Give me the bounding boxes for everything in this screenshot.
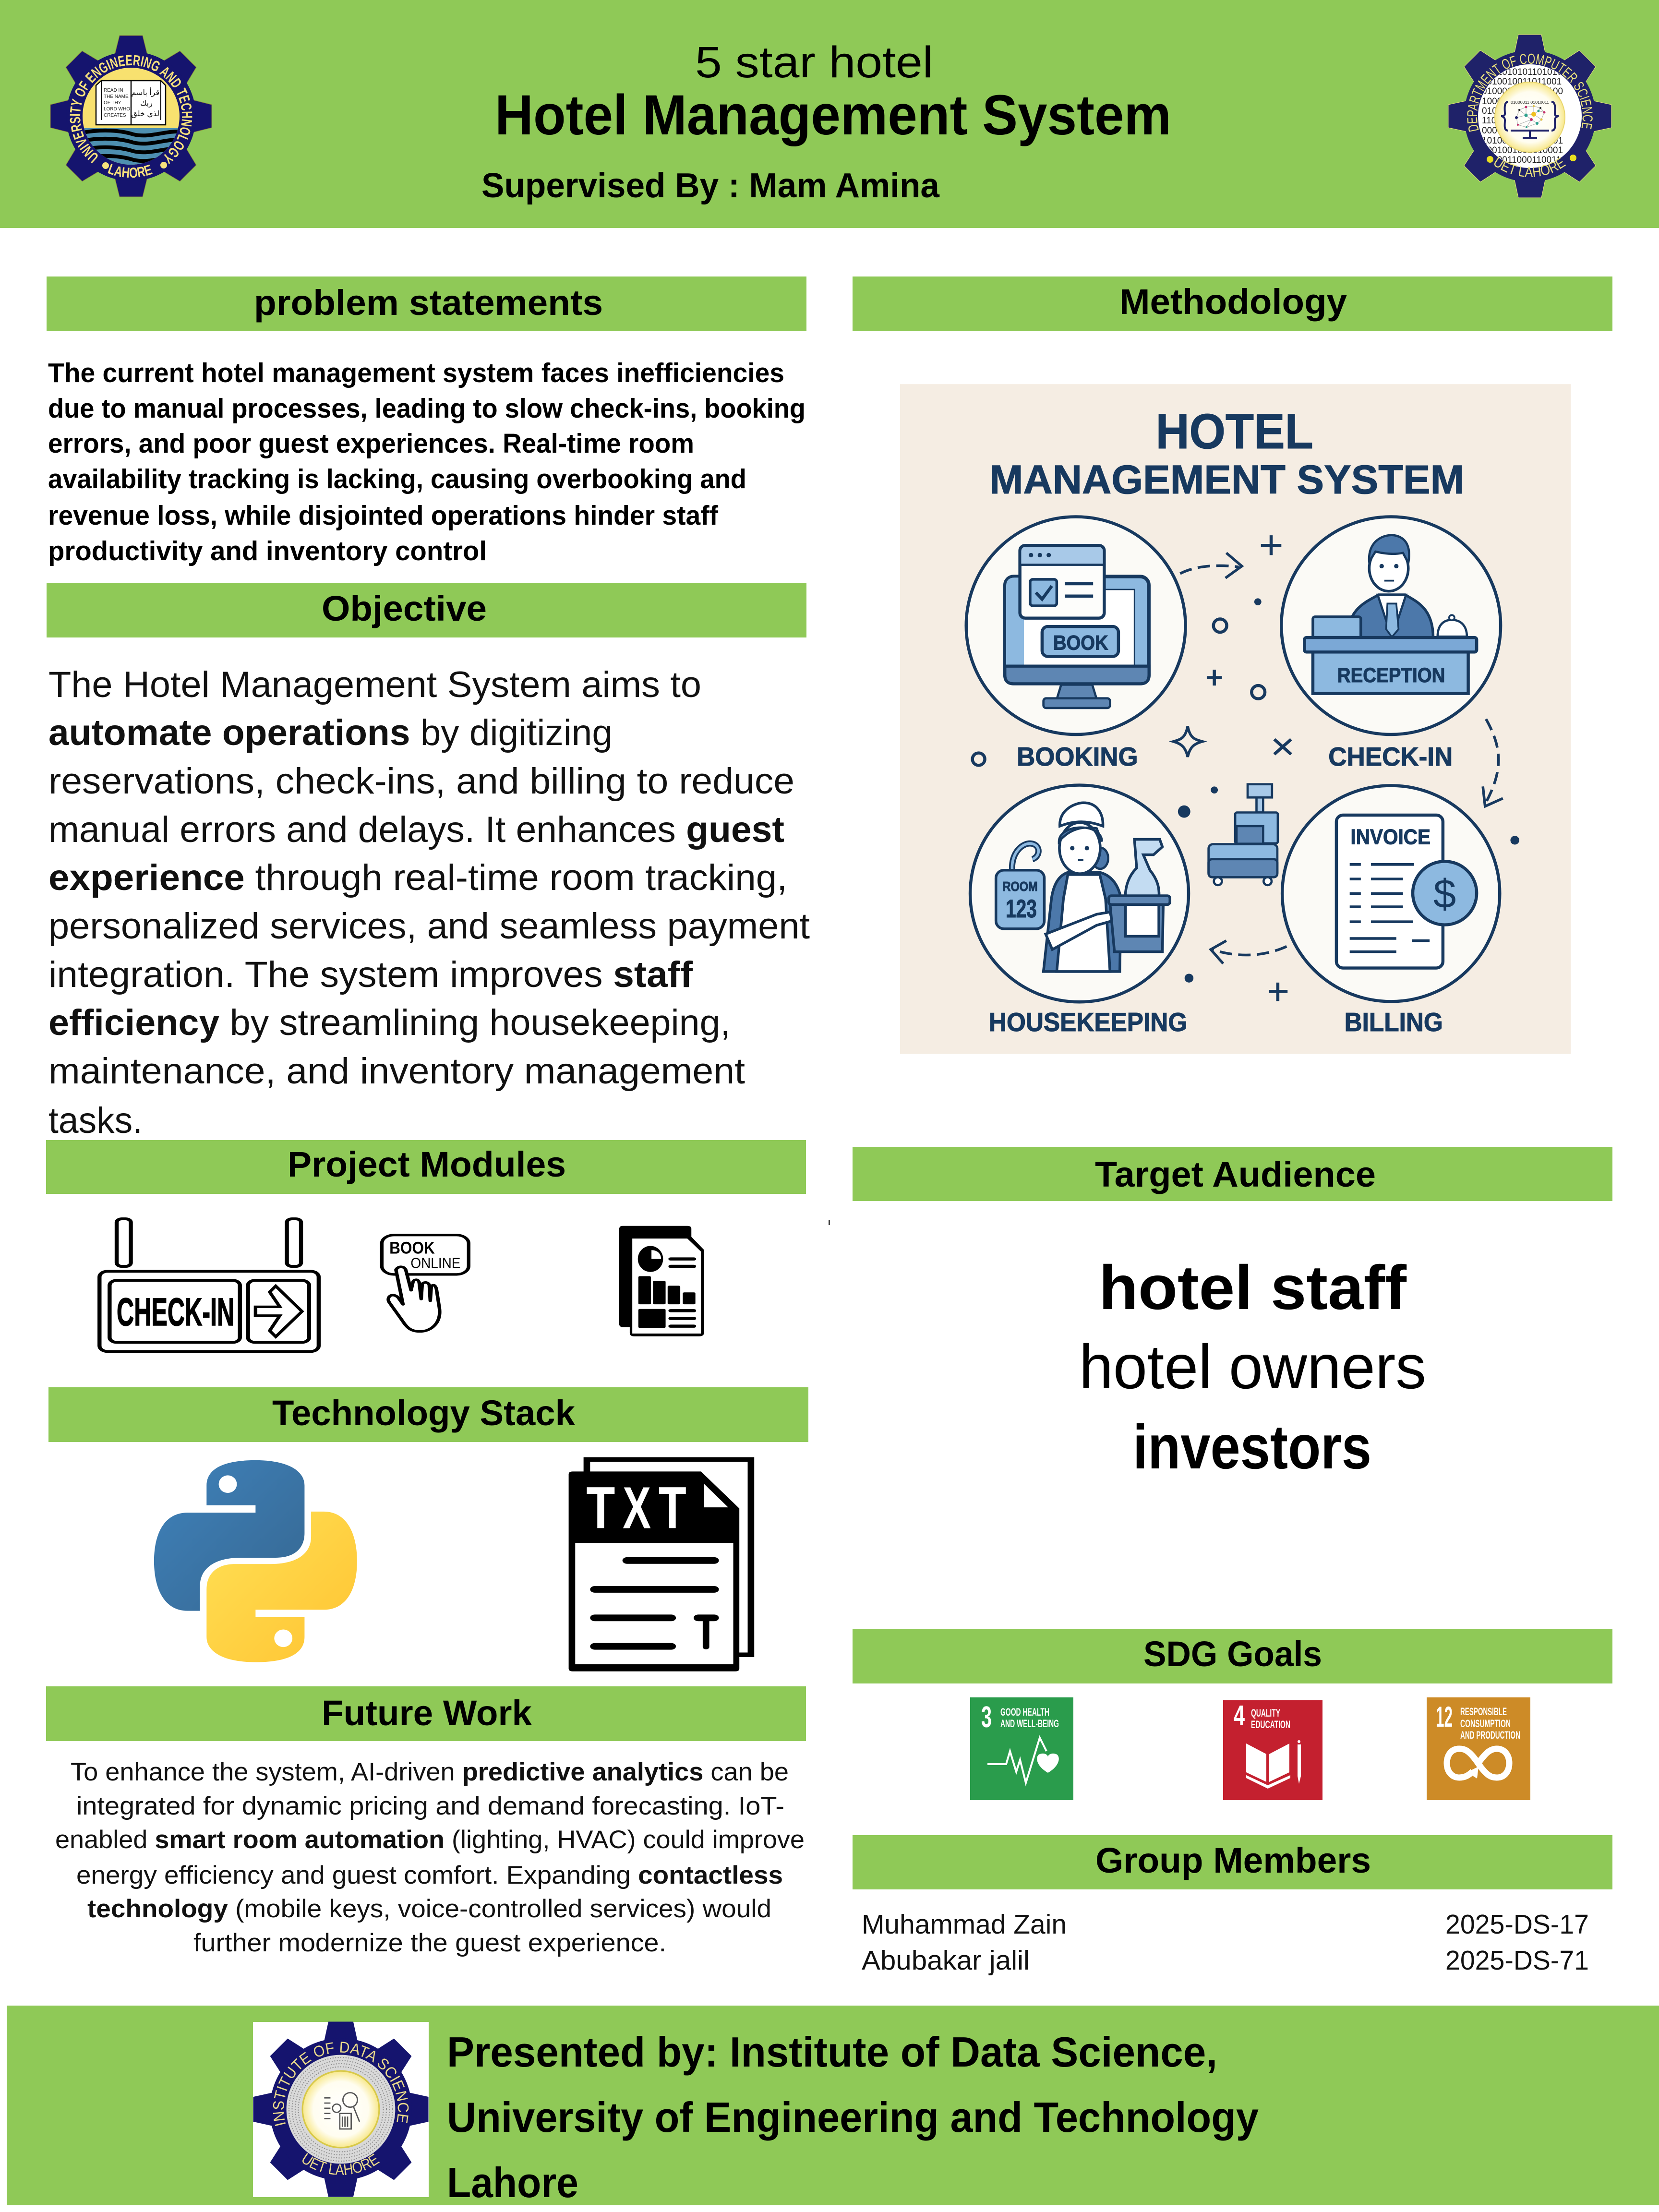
heading: group members: Group Members: [1095, 1840, 1371, 1880]
icon: sdg 3 good health: [970, 1697, 1073, 1800]
heading: technology stack: [48, 1387, 808, 1442]
icon: sdg 4 quality education: QUALITY: [1251, 1707, 1280, 1719]
text block: problem statements: productivity and inventory control: [48, 536, 487, 566]
heading: sdg goals: SDG Goals: [1143, 1634, 1322, 1674]
logo: institute of data science emblem: INSTITUTE OF DATA SCIENCE: [273, 2042, 409, 2126]
text block: group members: Abubakar jalil: [862, 1945, 1030, 1976]
icon: sdg 4 quality education: [1223, 1700, 1322, 1800]
text block: target audience: hotel owners: [1079, 1332, 1426, 1402]
text block: target audience: investors: [1133, 1412, 1371, 1482]
icon: sdg 12 responsible consumption: RESPONSIBLE: [1460, 1706, 1507, 1718]
logo: department of computer science emblem: 1100110010100001: [1482, 116, 1562, 126]
logo: UET university emblem: READ IN: [104, 88, 123, 93]
billing circle: $: [1433, 871, 1456, 916]
logo: department of computer science emblem: 1000011000110011: [1482, 155, 1561, 165]
text block: objective: reservations, check-ins, and billing to reduce: [48, 761, 794, 802]
heading: sdg goals: [853, 1629, 1612, 1683]
footer text: [447, 2028, 1259, 2206]
icon: check-in sign: [99, 1219, 319, 1351]
booking circle: BOOKING: [1017, 742, 1138, 771]
heading: problem statements: [47, 276, 806, 331]
header text: subtitle: 5 star hotel: [695, 38, 933, 87]
logo: UET university emblem: THE NAME: [104, 94, 129, 99]
text block: group members: Muhammad Zain: [862, 1909, 1067, 1940]
text block: group members: 2025-DS-17: [1445, 1909, 1589, 1940]
logo: UET university emblem: LORD WHO: [104, 107, 130, 112]
heading: methodology: Methodology: [1119, 282, 1347, 322]
logo: UET university emblem: OF THY: [104, 100, 121, 106]
icon: txt file: T: [586, 1475, 615, 1541]
icon: cash register: [1209, 784, 1278, 885]
text block: future work: To enhance the system, AI-driven predictive analytics can be: [71, 1758, 789, 1786]
text block: future work: [55, 1758, 805, 1957]
billing circle: INVOICE: [1351, 826, 1431, 849]
text block: problem statements: The current hotel management system faces inefficiencies: [48, 358, 784, 388]
text block: objective: experience through real-time room tracking,: [48, 857, 787, 898]
text block: problem statements: revenue loss, while disjointed operations hinder staff: [48, 500, 719, 531]
icon: report document: [619, 1226, 704, 1336]
text block: objective: personalized services, and seamless payment: [48, 906, 810, 947]
icon: sdg 12 responsible consumption: AND PRODUCTION: [1460, 1729, 1520, 1741]
logo: department of computer science emblem: [1448, 35, 1612, 198]
logo: department of computer science emblem: DEPARTMENT OF COMPUTER SCIENCE: [1467, 54, 1593, 132]
footer text: University of Engineering and Technology: [447, 2093, 1259, 2141]
logo: department of computer science emblem: UET LAHORE: [1494, 156, 1566, 177]
supervisor line: Supervised By : Mam Amina: [481, 167, 940, 205]
heading: project modules: [46, 1140, 806, 1194]
panel: hotel management illustration: [900, 384, 1571, 1054]
text block: group members: [862, 1909, 1589, 1976]
icon: sdg 12 responsible consumption: CONSUMPTION: [1460, 1718, 1511, 1730]
text block: target audience: [1079, 1252, 1426, 1482]
heading: project modules: Project Modules: [288, 1144, 566, 1184]
text block: problem statements: availability tracking is lacking, causing overbooking and: [48, 464, 746, 494]
icon: sdg 3 good health: 3: [981, 1701, 992, 1734]
icon: sdg 3 good health: AND WELL-BEING: [1000, 1718, 1059, 1730]
logo: UET university emblem: LAHORE: [108, 164, 153, 178]
text block: future work: technology (mobile keys, voice-controlled services) would: [87, 1895, 771, 1923]
booking circle: BOOK: [1053, 632, 1108, 654]
logo: UET university emblem: اقرأ باسم: [131, 87, 162, 97]
logo: department of computer science emblem: 1001001001010001: [1482, 145, 1563, 156]
text block: objective: maintenance, and inventory management: [48, 1051, 745, 1092]
text block: objective: tasks.: [48, 1100, 143, 1141]
booking circle: [966, 517, 1186, 771]
icon: sdg 3 good health: GOOD HEALTH: [1000, 1706, 1049, 1718]
icon: txt file: T: [659, 1475, 686, 1541]
logo: institute of data science emblem: [253, 2022, 429, 2197]
icon: sdg 12 responsible consumption: [1427, 1697, 1530, 1800]
text block: objective: manual errors and delays. It enhances guest: [48, 809, 784, 850]
check-in circle: CHECK-IN: [1328, 742, 1453, 771]
heading: problem statements: problem statements: [254, 283, 603, 323]
arrow: check-in to billing: [1483, 719, 1503, 806]
logo: UET university emblem: UNIVERSITY OF ENGINEERING AND TECHNOLOGY: [70, 55, 192, 164]
icon: sdg 4 quality education: 4: [1234, 1700, 1245, 1731]
text block: objective: automate operations by digitizing: [48, 712, 613, 753]
logo: UET university emblem: CREATES: [104, 113, 126, 118]
text block: problem statements: [48, 358, 805, 566]
footer band: [7, 2006, 1659, 2205]
logo: UET university emblem: ربك: [140, 99, 153, 108]
logo: department of computer science emblem: 1000100001101101: [1482, 96, 1562, 107]
icon: python logo: [154, 1460, 357, 1662]
heading: future work: Future Work: [322, 1693, 532, 1733]
icon: txt file: [569, 1459, 751, 1671]
text block: problem statements: errors, and poor guest experiences. Real-time room: [48, 428, 694, 459]
logo: UET university emblem: الذي خلق: [131, 110, 162, 119]
housekeeping circle: ROOM: [1003, 879, 1038, 894]
logo: department of computer science emblem: 0100010000100100: [1482, 86, 1563, 96]
logo: department of computer science emblem: 0000100011011100: [1482, 126, 1561, 136]
text block: objective: efficiency by streamlining housekeeping,: [48, 1002, 731, 1043]
heading: objective: Objective: [322, 589, 487, 628]
heading: technology stack: Technology Stack: [272, 1393, 576, 1433]
title: Hotel Management System: [495, 84, 1171, 147]
logo: department of computer science emblem: 0010010011011001: [1482, 77, 1562, 87]
logo: institute of data science emblem: UET LAHORE: [302, 2152, 380, 2176]
text block: group members: 2025-DS-71: [1445, 1945, 1589, 1976]
text block: problem statements: due to manual processes, leading to slow check-ins, booking: [48, 393, 805, 424]
illustration title: MANAGEMENT SYSTEM: [989, 457, 1464, 502]
check-in circle: RECEPTION: [1337, 664, 1445, 686]
text block: future work: energy efficiency and guest comfort. Expanding contactless: [76, 1861, 783, 1889]
heading: target audience: [853, 1147, 1612, 1201]
icon: book online: ONLINE: [410, 1255, 460, 1272]
logo: department of computer science emblem: 0101010101101010: [1482, 67, 1563, 77]
tiny stray mark: [829, 1220, 830, 1225]
text block: objective: The Hotel Management System aims to: [48, 664, 701, 705]
housekeeping circle: HOUSEKEEPING: [989, 1007, 1187, 1037]
icon: sdg 4 quality education: EDUCATION: [1251, 1719, 1290, 1731]
text block: future work: enabled smart room automation (lighting, HVAC) could improve: [55, 1826, 805, 1854]
icon: check-in sign: CHECK-IN: [117, 1290, 234, 1334]
billing circle: BILLING: [1345, 1007, 1443, 1037]
footer text: Lahore: [447, 2159, 578, 2206]
decorative sparkles: [973, 535, 1519, 1001]
icon: book online: [382, 1235, 469, 1332]
text block: target audience: hotel staff: [1099, 1252, 1407, 1322]
icon: txt file: X: [623, 1475, 651, 1541]
arrow: billing to housekeeping: [1211, 941, 1286, 963]
logo: department of computer science emblem: 01000011 01010011: [1511, 100, 1550, 105]
text block: objective: [48, 664, 810, 1141]
housekeeping circle: 123: [1006, 895, 1037, 923]
logo: UET university emblem: [50, 36, 212, 197]
footer text: Presented by: Institute of Data Science,: [447, 2028, 1217, 2076]
heading: future work: [46, 1686, 806, 1741]
logo: department of computer science emblem: 1010010100101001: [1482, 136, 1563, 146]
icon: sdg 12 responsible consumption: 12: [1436, 1701, 1453, 1733]
heading: objective: [47, 583, 806, 637]
housekeeping circle: [970, 785, 1189, 1037]
heading: methodology: [853, 276, 1612, 331]
icon: book online: BOOK: [389, 1239, 435, 1258]
billing circle: [1282, 785, 1500, 1037]
check-in circle: [1281, 517, 1501, 771]
heading: group members: [853, 1835, 1612, 1889]
arrow: booking to check-in: [1180, 553, 1242, 578]
logo: department of computer science emblem: 0101001010011001: [1482, 106, 1563, 116]
text block: future work: integrated for dynamic pricing and demand forecasting. IoT-: [76, 1792, 784, 1820]
header band: [0, 0, 1659, 228]
text block: future work: further modernize the guest experience.: [193, 1929, 666, 1957]
heading: target audience: Target Audience: [1095, 1154, 1376, 1194]
illustration title: HOTEL: [1156, 404, 1313, 459]
text block: objective: integration. The system improves staff: [48, 954, 693, 995]
illustration title: [989, 404, 1464, 502]
